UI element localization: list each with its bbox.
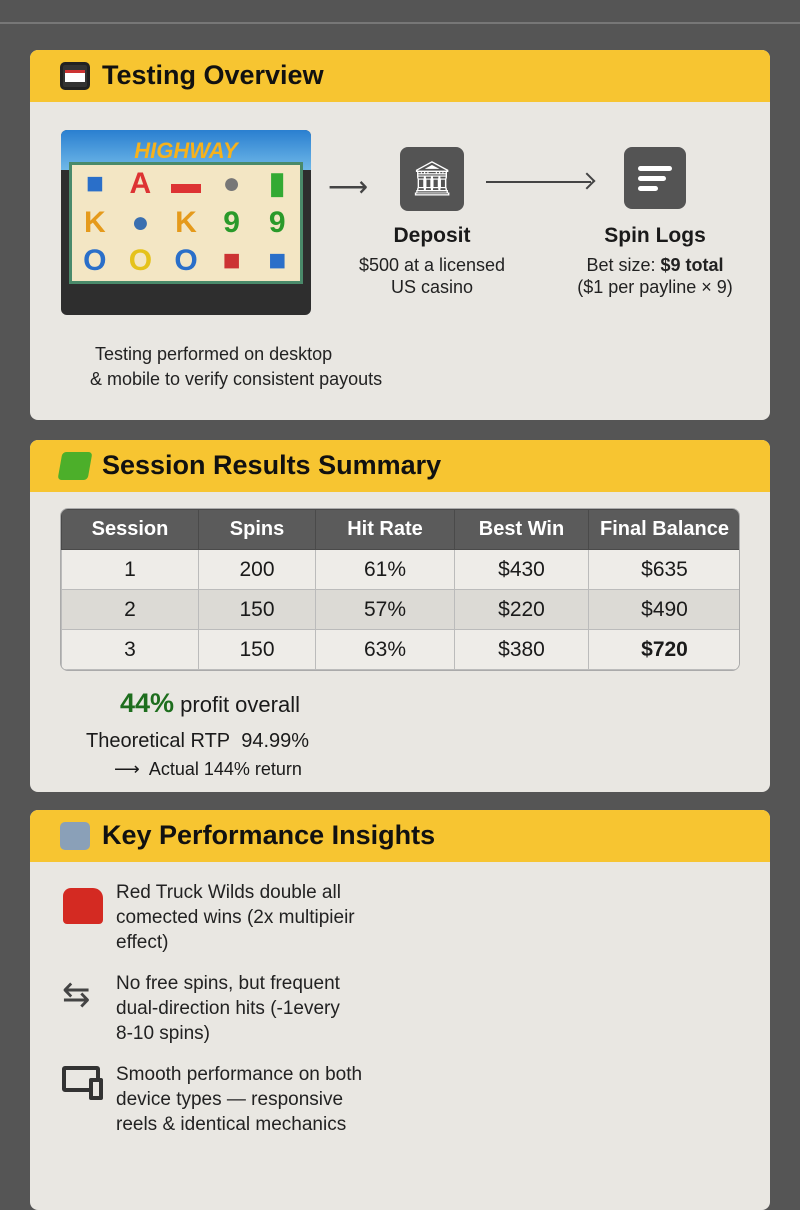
image: highway slot game: O (83, 244, 106, 277)
table: sessions: 200 (239, 558, 275, 580)
table: sessions: 61% (364, 558, 406, 580)
image: highway slot game: ▮ (269, 167, 285, 200)
text: deposit (359, 224, 505, 297)
table: sessions: 1 (124, 558, 136, 580)
image: highway slot game: O (174, 244, 198, 277)
image: highway slot game: 9 (223, 206, 240, 239)
text: testing note: Testing performed on desktop (95, 344, 332, 364)
icon: spin logs (624, 147, 686, 209)
insight: dual direction: No free spins, but frequent (116, 973, 340, 994)
table: sessions: Session (92, 518, 168, 540)
panel: session results (30, 440, 770, 792)
table: sessions: 2 (124, 598, 136, 620)
table: sessions: $490 (641, 598, 688, 620)
image: highway slot game: ■ (268, 244, 286, 277)
table: sessions: Spins (230, 518, 284, 540)
table: sessions: 3 (124, 638, 136, 660)
icon: devices (62, 1066, 103, 1100)
icon: slot machine (60, 62, 90, 90)
image: highway slot game: O (129, 244, 152, 277)
image: highway slot game (61, 130, 311, 315)
image: highway slot game: ▬ (171, 167, 201, 200)
image: highway slot game: K (175, 206, 197, 239)
icon: bank (400, 147, 464, 211)
text: deposit: US casino (391, 277, 473, 297)
panel: key insights (30, 810, 770, 1210)
table: sessions: 63% (364, 638, 406, 660)
icon: arrows: ⇆ (62, 976, 90, 1014)
panel: session results: ⟶ Actual 144% return (114, 759, 302, 779)
insight: dual direction (62, 973, 340, 1044)
panel: testing overview (30, 50, 770, 420)
text: testing note: & mobile to verify consistent payouts (90, 369, 382, 389)
text: rtp: Theoretical RTP 94.99% (86, 730, 309, 752)
table: sessions: 57% (364, 598, 406, 620)
text: spin logs: Bet size: $9 total (586, 255, 724, 275)
header: key insights: Key Performance Insights (102, 820, 435, 850)
image: highway slot game: HIGHWAY (134, 138, 238, 163)
icon: red truck (63, 888, 103, 924)
table: sessions: 150 (239, 598, 275, 620)
header: key insights (30, 810, 770, 862)
image: highway slot game: ■ (86, 167, 104, 200)
icon: truck (60, 822, 90, 850)
table: sessions: Best Win (479, 518, 564, 540)
image: highway slot game: 9 (269, 206, 286, 239)
table: sessions: Hit Rate (347, 518, 423, 540)
header: session results (30, 440, 770, 492)
text: spin logs: ($1 per payline × 9) (577, 277, 733, 297)
header: testing overview (30, 50, 770, 102)
table: sessions: $380 (498, 638, 545, 660)
icon: money (58, 452, 92, 480)
table: sessions: $635 (641, 558, 688, 580)
image: highway slot game: K (84, 206, 106, 239)
icon: bank: 🏛 (410, 160, 454, 198)
arrow: to deposit: ⟶ (328, 171, 368, 202)
arrow: to spin logs (486, 181, 591, 183)
image: highway slot game: ● (223, 167, 241, 200)
table: sessions: Final Balance (600, 518, 729, 540)
text: deposit: $500 at a licensed (359, 255, 505, 275)
text: deposit: Deposit (393, 224, 470, 247)
insight: dual direction: 8-10 spins) (116, 1023, 210, 1044)
header: session results: Session Results Summary (102, 450, 441, 480)
text: spin logs (577, 224, 733, 297)
insight: red truck wilds: Red Truck Wilds double all comected wins (2x multipieir effect) (116, 882, 355, 953)
table: sessions: 150 (239, 638, 275, 660)
image: highway slot game: ● (131, 206, 149, 239)
stat: profit: 44% profit overall (120, 688, 300, 718)
table: sessions: $430 (498, 558, 545, 580)
image: highway slot game: ■ (223, 244, 241, 277)
text: testing note (90, 344, 382, 389)
header: testing overview: Testing Overview (102, 60, 324, 90)
table: sessions (60, 508, 740, 671)
table: sessions: $220 (498, 598, 545, 620)
image: highway slot game: A (130, 167, 151, 200)
insight: dual direction: dual-direction hits (-1every (116, 998, 340, 1019)
insight: devices: Smooth performance on both device types — responsive reels & identical mechanics (116, 1064, 362, 1135)
text: spin logs: Spin Logs (604, 224, 706, 247)
table: sessions: $720 (641, 638, 688, 660)
